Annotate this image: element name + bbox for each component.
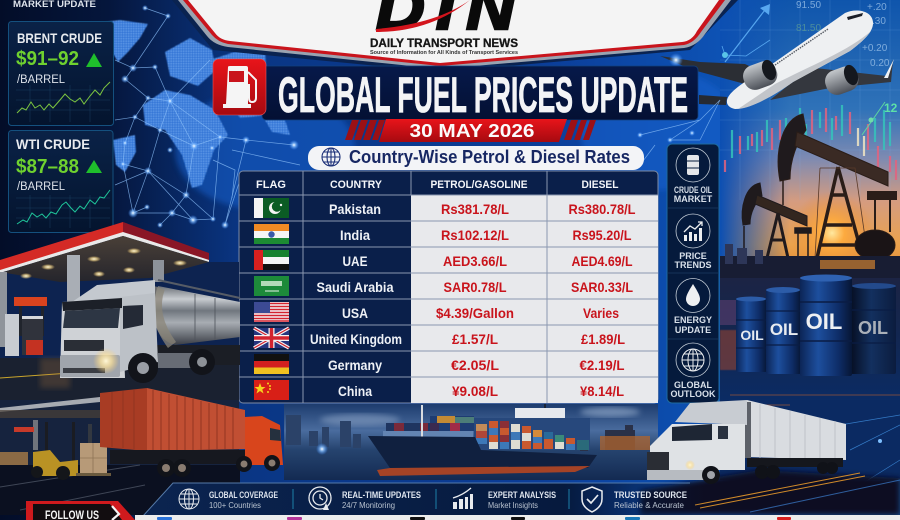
barrel 1: OIL xyxy=(740,327,764,343)
row: Germany: €2.05/L xyxy=(451,357,499,373)
feature: trusted source xyxy=(582,487,687,512)
gas station scene xyxy=(0,222,239,400)
row: India: Rs102.12/L xyxy=(441,227,509,243)
date: 30 MAY 2026 xyxy=(410,121,534,141)
feature: trusted source: Reliable & Accurate xyxy=(614,500,684,510)
tanker truck xyxy=(60,280,240,383)
icon: fuel pump xyxy=(213,59,266,115)
subtitle pill xyxy=(308,146,644,170)
row: United Kingdom: United Kingdom xyxy=(310,331,402,347)
row: Pakistan xyxy=(254,198,636,218)
right skyline backdrop with market chart: 12 xyxy=(884,101,898,115)
panel: WTI crude xyxy=(8,130,113,232)
row: Germany: Germany xyxy=(328,357,382,373)
feature: global coverage xyxy=(179,489,278,510)
item: energy update xyxy=(674,278,712,335)
feature: global coverage: GLOBAL COVERAGE xyxy=(209,490,278,500)
item: crude oil market: MARKET xyxy=(674,194,713,204)
row: Pakistan: Pakistan xyxy=(329,201,381,217)
feature: expert analysis xyxy=(453,488,556,510)
row: Saudi Arabia: SAR0.33/L xyxy=(571,279,633,295)
sparkline xyxy=(17,190,110,224)
network nodes xyxy=(120,5,695,229)
row: USA: Varies xyxy=(583,305,619,321)
heading: BRENT CRUDE xyxy=(17,30,102,46)
header white banner xyxy=(172,0,738,72)
oil barrels xyxy=(736,274,896,376)
row: USA: $4.39/Gallon xyxy=(436,305,514,321)
item: price trends: PRICE xyxy=(679,251,707,261)
barrel 1 xyxy=(736,296,767,372)
heading: WTI CRUDE xyxy=(16,136,90,152)
panel: Brent crude xyxy=(8,22,114,126)
airplane xyxy=(660,10,894,109)
icon: up arrow xyxy=(86,53,102,67)
barrel 3 xyxy=(800,274,852,376)
table header xyxy=(256,179,619,191)
world map network xyxy=(90,5,720,229)
item: crude oil market xyxy=(674,148,713,204)
barrel 4: OIL xyxy=(858,318,888,338)
icon: globe xyxy=(322,148,340,166)
row: China: ¥8.14/L xyxy=(580,383,624,399)
item: global outlook: OUTLOOK xyxy=(670,389,716,399)
row: Saudi Arabia: SAR0.78/L xyxy=(444,279,507,295)
social media strip xyxy=(135,515,900,520)
feature: global coverage: 100+ Countries xyxy=(209,500,261,510)
item: global outlook: GLOBAL xyxy=(674,380,712,390)
row: India xyxy=(254,224,632,244)
logo: Source of Information for All Kinds of Transport Services xyxy=(370,50,518,56)
right skyline backdrop with market chart: 81.50 xyxy=(796,23,821,34)
row: China: ¥9.08/L xyxy=(452,383,498,399)
white semi truck xyxy=(647,400,846,484)
row: United Kingdom xyxy=(254,328,625,348)
right skyline backdrop with market chart: 91.50 xyxy=(796,0,821,11)
unit: /BARREL xyxy=(17,181,66,193)
feature: expert analysis: EXPERT ANALYSIS xyxy=(488,490,556,500)
logo xyxy=(370,0,518,56)
item: energy update: ENERGY xyxy=(674,315,712,325)
item: crude oil market: CRUDE OIL xyxy=(674,185,712,195)
row: India: Rs95.20/L xyxy=(572,227,632,243)
row: Germany: €2.19/L xyxy=(580,357,625,373)
row: Germany xyxy=(254,354,625,374)
right skyline backdrop with market chart: 0.20 xyxy=(870,58,890,69)
forklift xyxy=(31,422,111,480)
item: price trends xyxy=(674,214,712,270)
feature: trusted source: TRUSTED SOURCE xyxy=(614,490,687,500)
bottom feature strip xyxy=(143,483,705,516)
title bar xyxy=(262,66,698,123)
logo: DAILY TRANSPORT NEWS xyxy=(370,38,518,50)
icon: up arrow xyxy=(86,160,102,173)
right skyline backdrop with market chart: +.20 xyxy=(867,2,887,13)
candlestick chart xyxy=(725,105,896,180)
barrel 4 xyxy=(851,283,896,374)
row: UAE: AED3.66/L xyxy=(443,253,507,269)
table header: COUNTRY xyxy=(330,179,383,191)
feature: expert analysis: Market Insights xyxy=(488,500,538,510)
barrel 2 xyxy=(766,287,801,374)
right skyline backdrop with market chart xyxy=(720,0,900,275)
feature: real-time updates: REAL-TIME UPDATES xyxy=(342,490,421,500)
subtitle: Country-Wise Petrol & Diesel Rates xyxy=(349,147,630,167)
feature: real-time updates: 24/7 Monitoring xyxy=(342,500,395,510)
map landmasses xyxy=(90,20,290,188)
row: Pakistan: Rs381.78/L xyxy=(441,201,509,217)
item: energy update: UPDATE xyxy=(675,325,711,335)
barrel 2: OIL xyxy=(770,320,798,339)
price: $91–92 xyxy=(16,48,79,70)
row: Pakistan: Rs380.78/L xyxy=(568,201,636,217)
barrel 3: OIL xyxy=(806,309,842,334)
row: USA xyxy=(254,302,619,322)
row: Saudi Arabia xyxy=(254,276,633,296)
feature: real-time updates xyxy=(309,487,421,510)
follow us button xyxy=(26,501,135,520)
canopy xyxy=(0,222,209,347)
right skyline backdrop with market chart: +0.20 xyxy=(862,43,888,54)
row: Saudi Arabia: Saudi Arabia xyxy=(316,279,394,295)
row: UAE xyxy=(254,250,633,270)
table header: FLAG xyxy=(256,179,286,191)
item: price trends: TRENDS xyxy=(674,260,712,270)
date ribbon xyxy=(345,119,596,142)
row: United Kingdom: £1.89/L xyxy=(581,331,625,347)
table header: PETROL/GASOLINE xyxy=(430,179,528,191)
sparkline xyxy=(17,82,110,113)
right skyline backdrop with market chart: .30 xyxy=(872,16,886,27)
pumpjack: small xyxy=(742,183,811,258)
table header: DIESEL xyxy=(582,179,619,191)
row: USA: USA xyxy=(342,305,368,321)
refinery skyline and floor xyxy=(720,244,900,485)
lower road scene xyxy=(0,397,240,515)
fuel pump xyxy=(5,297,47,356)
item: global outlook xyxy=(670,343,716,399)
container truck xyxy=(100,388,283,477)
panel: topic sidebar xyxy=(667,144,719,403)
row: UAE: UAE xyxy=(342,253,368,269)
row: UAE: AED4.69/L xyxy=(572,253,633,269)
road, right xyxy=(640,470,900,515)
pumpjack: large xyxy=(778,114,896,260)
row: China xyxy=(254,380,624,400)
fuel price table xyxy=(239,171,658,403)
container ship xyxy=(368,404,597,476)
row: China: China xyxy=(338,383,372,399)
row: United Kingdom: £1.57/L xyxy=(452,331,498,347)
price: $87–88 xyxy=(16,156,79,178)
harbor scene xyxy=(284,404,658,480)
unit: /BARREL xyxy=(17,74,66,86)
row: India: India xyxy=(340,227,370,243)
